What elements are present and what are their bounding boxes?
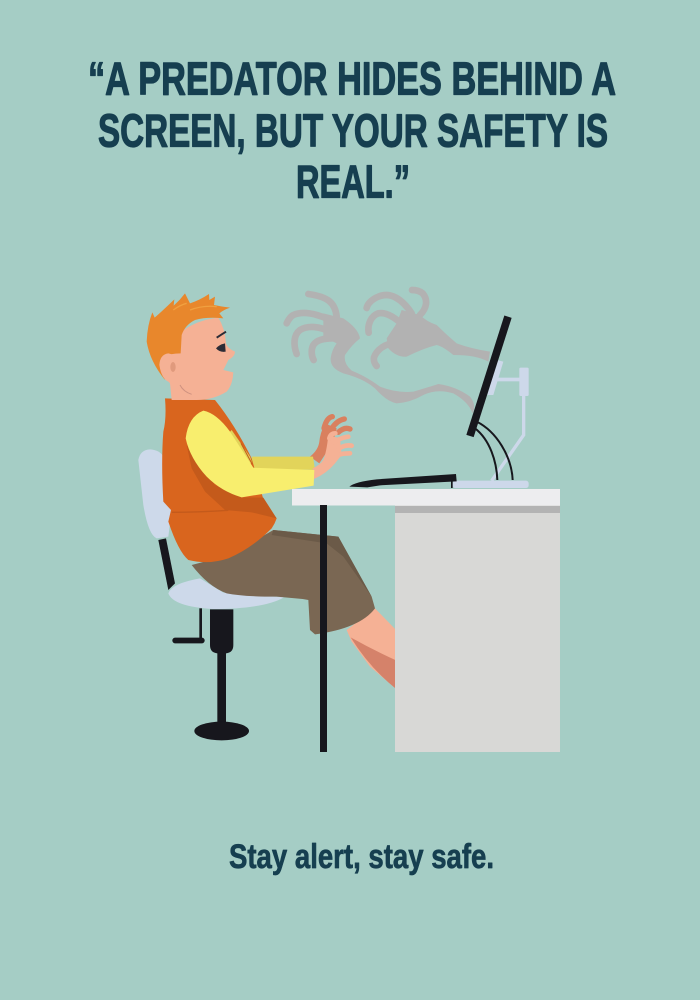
far sleeve	[252, 457, 315, 470]
near hand	[313, 433, 352, 479]
right claw	[367, 290, 490, 366]
desk	[292, 489, 560, 752]
left claw	[287, 294, 474, 413]
near sleeve	[186, 411, 314, 497]
keyboard	[349, 474, 457, 488]
boy upper body	[147, 293, 352, 562]
vest	[162, 398, 277, 562]
eye and eyebrow	[216, 343, 226, 352]
chair	[138, 449, 284, 740]
title	[88, 52, 616, 207]
illustration: frightened boy at a computer	[138, 290, 560, 752]
ghostly smoke claws	[287, 290, 490, 413]
monitor and cables	[470, 317, 513, 480]
title: REAL.”	[296, 155, 410, 207]
far hand	[310, 417, 350, 463]
hair	[147, 293, 230, 380]
monitor stand	[453, 360, 529, 488]
ear	[159, 353, 178, 382]
far leg and trousers	[192, 530, 397, 689]
tagline: Stay alert, stay safe.	[229, 838, 494, 876]
head	[147, 293, 235, 400]
